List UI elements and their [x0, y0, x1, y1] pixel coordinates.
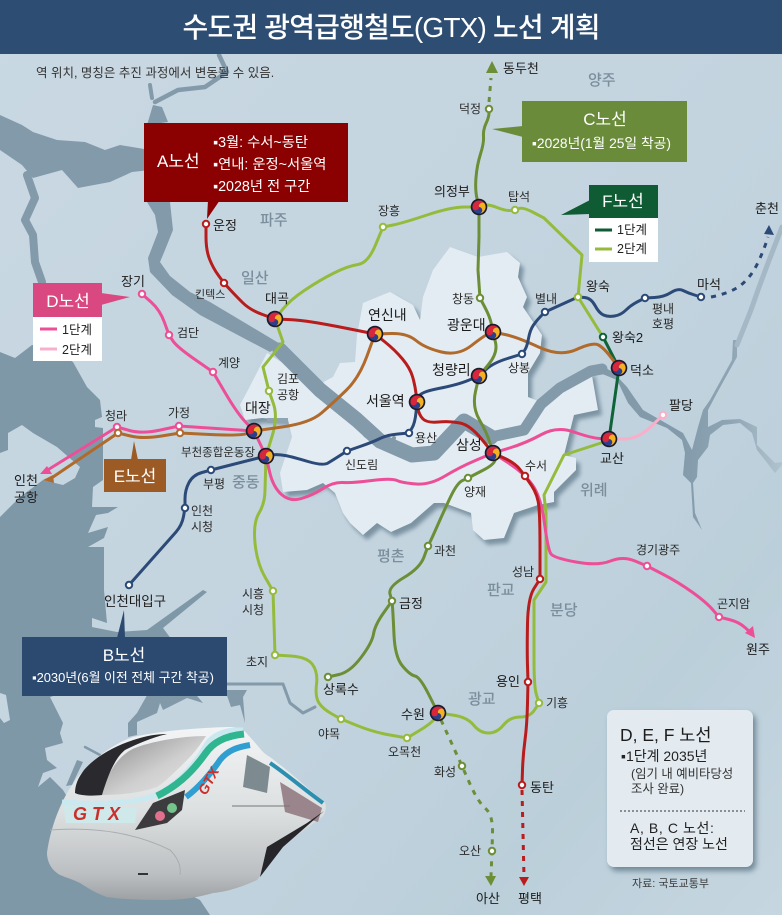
- line F phase 2: [254, 205, 609, 738]
- callout: A line: ▪연내: 운정~서울역: [213, 156, 326, 173]
- callout: F line legend: 2단계: [617, 242, 647, 256]
- station labels: 팔당: [669, 398, 693, 413]
- station labels: 성남: [512, 565, 534, 579]
- callout: E line: E노선: [114, 467, 156, 486]
- line B: [129, 225, 774, 585]
- station labels: 부평: [203, 477, 225, 491]
- callout: D line legend: 2단계: [62, 343, 92, 357]
- station labels: 공항: [14, 490, 38, 505]
- station labels: 화성: [434, 765, 456, 779]
- callout: A line: A노선: [157, 152, 200, 171]
- info panel: D E F lines: D, E, F 노선: [620, 725, 712, 745]
- source note: 자료: 국토교통부: [632, 877, 709, 890]
- station labels: 인천: [14, 473, 38, 488]
- callout: A line: [144, 123, 348, 219]
- station labels: 연신내: [368, 307, 407, 323]
- station labels: 금정: [399, 596, 423, 611]
- callout: D line legend: [33, 283, 130, 361]
- station labels: 왕숙2: [612, 330, 643, 345]
- station labels: 서울역: [366, 393, 405, 409]
- callout: D line legend: 1단계: [62, 323, 92, 337]
- station labels: 가정: [168, 406, 190, 420]
- station labels: 시흥: [242, 587, 264, 601]
- station labels: 운정: [213, 218, 237, 233]
- station labels: 대곡: [265, 291, 289, 306]
- station labels: 공항: [277, 388, 299, 402]
- station labels: 광운대: [447, 317, 486, 333]
- station labels: 덕정: [459, 102, 481, 116]
- station labels: 호평: [652, 317, 674, 331]
- map: Seoul and Gimpo land: [240, 247, 598, 540]
- station labels: 대장: [245, 400, 271, 416]
- station labels: 시청: [242, 603, 264, 617]
- station labels: 부천종합운동장: [181, 445, 255, 459]
- info panel: D E F lines: [607, 710, 756, 871]
- station labels: 수원: [401, 707, 425, 722]
- station labels: 기흥: [546, 696, 568, 710]
- line F phase 1: [603, 337, 619, 439]
- map: Seoul shadow: [244, 252, 602, 545]
- map: sea and coastline: [0, 345, 315, 915]
- region labels: 분당: [550, 602, 578, 619]
- GTX train illustration: GTX: [195, 763, 223, 797]
- station labels: 인천: [191, 503, 213, 518]
- station labels: 삼성: [456, 437, 482, 453]
- station labels: 과천: [434, 543, 456, 558]
- info panel: D E F lines: ▪1단계 2035년: [621, 748, 707, 764]
- callout: B line: B노선: [103, 646, 145, 665]
- station labels: 창동: [452, 292, 474, 306]
- callout: F line legend: 1단계: [617, 223, 647, 237]
- station labels: 상봉: [508, 361, 530, 375]
- callout: C line: ▪2028년(1월 25일 착공): [532, 136, 671, 151]
- region labels: 일산: [241, 270, 269, 287]
- info panel: D E F lines: A, B, C 노선:: [630, 820, 714, 836]
- station labels: 교산: [600, 451, 624, 466]
- region labels: 위례: [580, 482, 608, 499]
- line C: [328, 61, 498, 886]
- station labels: 평내: [652, 302, 674, 316]
- station labels: 탑석: [508, 190, 530, 204]
- region labels: 광교: [468, 691, 496, 708]
- station labels: 장기: [121, 274, 145, 289]
- line D phase 2: [609, 415, 663, 439]
- station labels: 김포: [277, 372, 299, 386]
- info panel: D E F lines: 조사 완료): [631, 782, 684, 796]
- region labels: 중동: [232, 474, 260, 491]
- callout: B line: ▪2030년(6월 이전 전체 구간 착공): [32, 670, 214, 685]
- callout: C line: C노선: [583, 110, 627, 129]
- station labels: 인천대입구: [104, 594, 166, 609]
- GTX train illustration: GTX: [73, 804, 121, 824]
- station labels: 청량리: [432, 362, 471, 378]
- line E: [50, 332, 619, 479]
- station labels: 아산: [476, 891, 500, 906]
- callout: B line: [22, 610, 227, 696]
- station labels: 동두천: [503, 61, 539, 76]
- callout: A line: ▪3월: 수서~동탄: [213, 134, 308, 151]
- station labels: 킨텍스: [195, 288, 225, 301]
- map: northern rivers: [0, 55, 282, 352]
- note: location disclaimer: 역 위치, 명칭은 추진 과정에서 변동될 수 있음.: [36, 66, 274, 80]
- station labels: 왕숙: [586, 279, 610, 294]
- station labels: 청라: [105, 409, 127, 423]
- station labels: 검단: [177, 326, 199, 340]
- station labels: 평택: [518, 891, 542, 906]
- line D phase 1: [46, 294, 751, 633]
- callout: A line: ▪2028년 전 구간: [213, 178, 310, 195]
- callout: E line: [104, 441, 166, 492]
- station labels: 장흥: [378, 204, 400, 218]
- callout: F line legend: F노선: [602, 192, 644, 211]
- info panel: D E F lines: (임기 내 예비타당성: [631, 767, 733, 781]
- callout: C line: [492, 101, 687, 162]
- line arrowheads D and E: [40, 466, 755, 638]
- station labels: 곤지암: [717, 597, 750, 611]
- info panel: D E F lines: 점선은 연장 노선: [630, 836, 728, 852]
- title bar: [0, 0, 782, 54]
- station labels: 오산: [459, 844, 481, 858]
- callout: F line legend: [561, 185, 658, 262]
- station labels: 양재: [464, 485, 486, 499]
- station labels: 상록수: [323, 682, 359, 697]
- map: Han river: [267, 227, 782, 530]
- station labels: 야목: [318, 727, 340, 741]
- station labels: 시청: [191, 520, 213, 534]
- callout: D line legend: D노선: [46, 292, 90, 311]
- station markers: [114, 106, 722, 854]
- station labels: 용인: [496, 674, 520, 689]
- station labels: 동탄: [530, 780, 554, 795]
- GTX train illustration: [47, 727, 326, 900]
- station labels: 계양: [218, 356, 240, 370]
- station labels: 초지: [246, 655, 268, 669]
- station labels: 별내: [535, 292, 557, 306]
- region labels: 양주: [588, 72, 616, 89]
- station labels: 경기광주: [636, 543, 680, 557]
- title bar: 수도권 광역급행철도(GTX) 노선 계획: [182, 12, 600, 43]
- region labels: 평촌: [377, 548, 405, 565]
- region labels: [232, 72, 616, 708]
- transfer hubs: [246, 199, 627, 721]
- region labels: 판교: [487, 582, 515, 599]
- station labels: 신도림: [345, 458, 378, 472]
- station labels: 의정부: [434, 184, 470, 199]
- station labels: 덕소: [630, 363, 654, 378]
- station labels: 용산: [415, 431, 437, 445]
- station labels: 춘천: [755, 201, 779, 216]
- station labels: 마석: [697, 277, 721, 292]
- station labels: 원주: [746, 642, 770, 657]
- station labels: 수서: [525, 459, 547, 473]
- station labels: 오목천: [388, 744, 421, 759]
- region labels: 파주: [260, 212, 288, 229]
- line A: [206, 224, 540, 886]
